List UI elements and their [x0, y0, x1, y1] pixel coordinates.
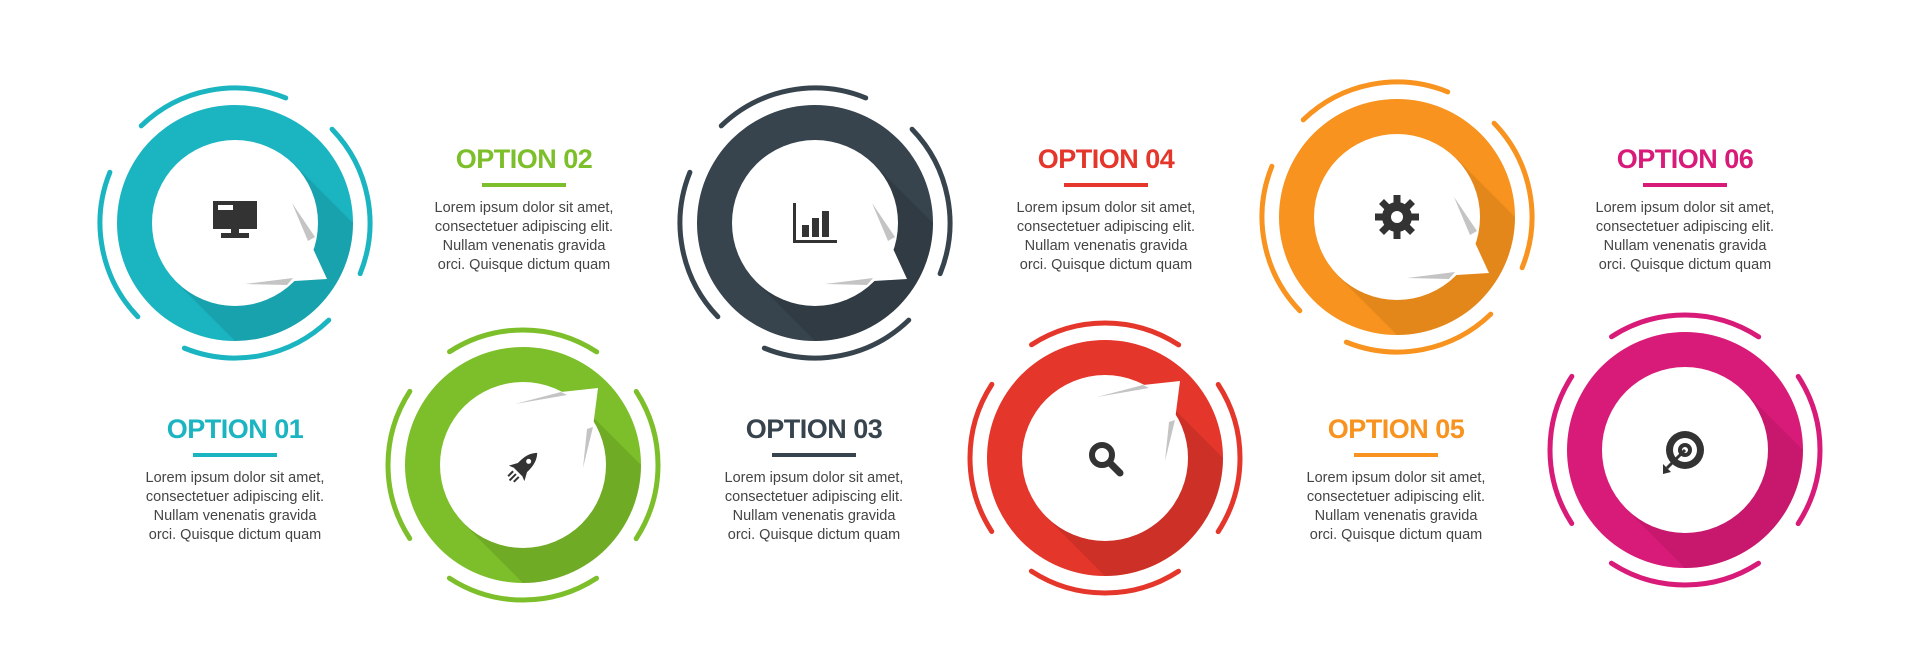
text: option 02: Lorem ipsum dolor sit amet, [435, 200, 613, 216]
text: option 01 [146, 414, 324, 543]
icon: magnifier [1092, 445, 1120, 473]
circle 4: red [968, 320, 1242, 596]
icon: monitor [213, 201, 257, 238]
circles graphic [97, 79, 1822, 602]
text: option 02: orci. Quisque dictum quam [438, 257, 610, 273]
text: option 05: Lorem ipsum dolor sit amet, [1307, 470, 1485, 486]
text: option 05: consectetuer adipiscing elit. [1307, 489, 1485, 505]
icon: rocket [502, 445, 545, 488]
text: option 03 [725, 414, 903, 543]
icon: bar chart [793, 203, 837, 243]
text: option 04: Lorem ipsum dolor sit amet, [1017, 200, 1195, 216]
text: option 04: OPTION 04 [1038, 144, 1174, 174]
text: option 05: orci. Quisque dictum quam [1310, 527, 1482, 543]
text: option 02 [435, 144, 613, 273]
text: option 03: Lorem ipsum dolor sit amet, [725, 470, 903, 486]
text: option 06: orci. Quisque dictum quam [1599, 257, 1771, 273]
text: option 04: Nullam venenatis gravida [1025, 238, 1187, 254]
text: option 03: orci. Quisque dictum quam [728, 527, 900, 543]
text: option 04 [1017, 144, 1195, 273]
circle 6: magenta [1548, 312, 1822, 588]
text: option 05: Nullam venenatis gravida [1315, 508, 1477, 524]
icon: gear [1375, 195, 1419, 239]
text: option 06: Nullam venenatis gravida [1604, 238, 1766, 254]
text: option 01: Nullam venenatis gravida [154, 508, 316, 524]
text: option 02: OPTION 02 [456, 144, 592, 174]
text: option 02: Nullam venenatis gravida [443, 238, 605, 254]
circle 2: green [386, 328, 660, 602]
text: option 01: orci. Quisque dictum quam [149, 527, 321, 543]
text: option 05 [1307, 414, 1485, 543]
text: option 01: Lorem ipsum dolor sit amet, [146, 470, 324, 486]
text: option 02: consectetuer adipiscing elit. [435, 219, 613, 235]
text: option 06: Lorem ipsum dolor sit amet, [1596, 200, 1774, 216]
text: option 05: OPTION 05 [1328, 414, 1464, 444]
circle 5: orange [1259, 79, 1535, 355]
text: option 06 [1596, 144, 1774, 273]
text: option 06: consectetuer adipiscing elit. [1596, 219, 1774, 235]
text: option 04: consectetuer adipiscing elit. [1017, 219, 1195, 235]
text: option 03: Nullam venenatis gravida [733, 508, 895, 524]
text: option 03: OPTION 03 [746, 414, 882, 444]
text: option 01: consectetuer adipiscing elit. [146, 489, 324, 505]
text: option 04: orci. Quisque dictum quam [1020, 257, 1192, 273]
icon: target [1663, 431, 1704, 474]
text: option 01: OPTION 01 [167, 414, 303, 444]
circle 3: dark [677, 85, 953, 361]
circle 1: teal [97, 85, 373, 361]
text: option 06: OPTION 06 [1617, 144, 1753, 174]
text: option 03: consectetuer adipiscing elit. [725, 489, 903, 505]
